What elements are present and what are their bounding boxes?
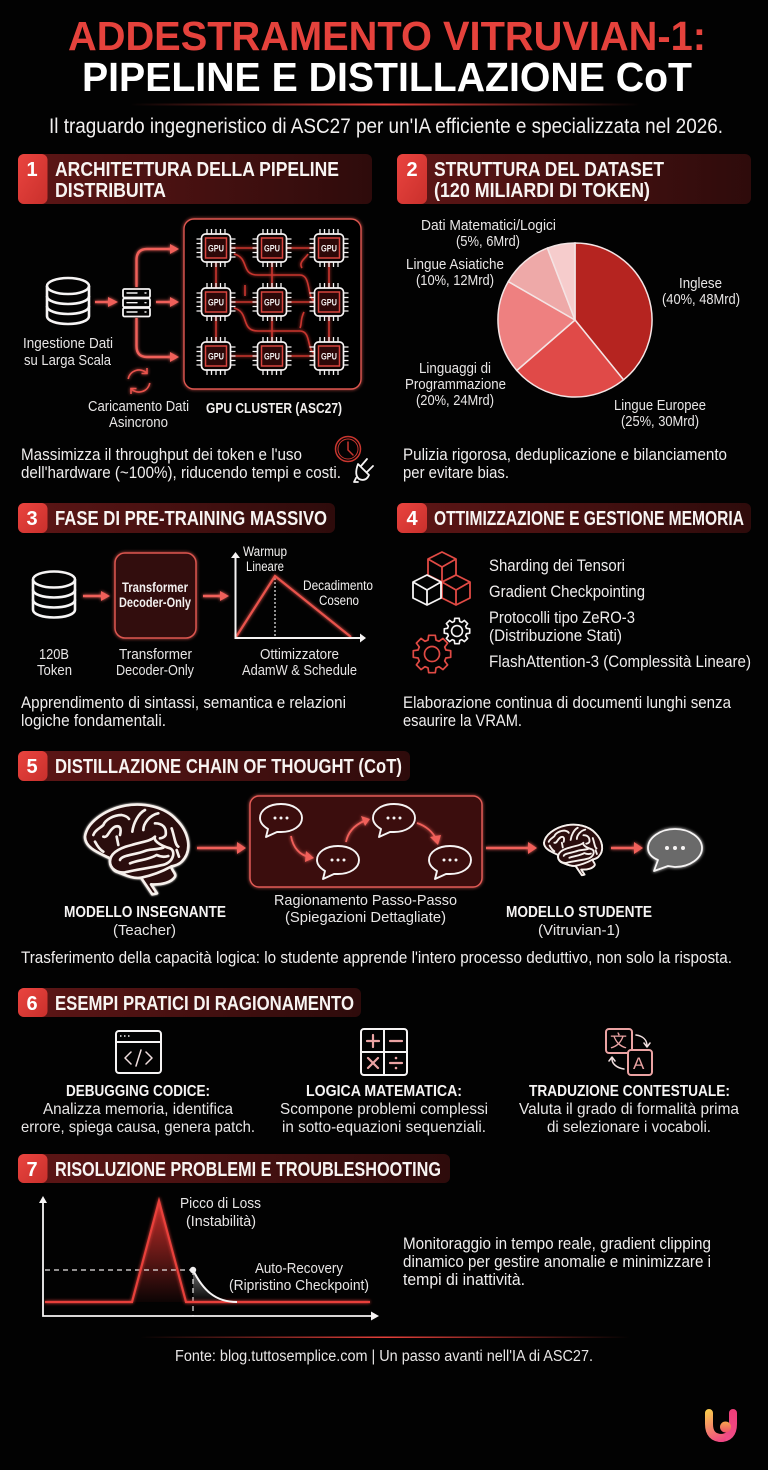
- labels: section 3: Transformer: [119, 646, 192, 663]
- icon: answer bubble: [648, 829, 702, 871]
- icon: code window: [116, 1031, 161, 1073]
- pie labels: Inglese: [679, 275, 722, 292]
- reasoning box: [250, 796, 482, 887]
- text: translation: Valuta il grado di formalità prima: [519, 1101, 739, 1118]
- transformer box: [115, 553, 196, 638]
- arrow: reasoning to student: [486, 842, 537, 854]
- pie labels: (10%, 12Mrd): [416, 272, 494, 289]
- text: section 4 description: esaurire la VRAM.: [403, 712, 522, 730]
- text: section 1 description: [21, 446, 341, 482]
- text: debugging: errore, spiega causa, genera patch.: [21, 1119, 255, 1136]
- text: async loading: Asincrono: [109, 414, 168, 431]
- heading: section 5: 5: [26, 756, 38, 778]
- heading: section 1: [18, 154, 372, 204]
- text: math logic: LOGICA MATEMATICA:: [306, 1083, 462, 1100]
- text: section 1 description: Massimizza il throughput dei token e l'uso: [21, 446, 302, 464]
- panel: section 2 dataset: [397, 154, 751, 482]
- chart: learning rate schedule: Coseno: [319, 593, 359, 608]
- text: section 2 description: per evitare bias.: [403, 464, 509, 482]
- text: debugging: Analizza memoria, identifica: [43, 1101, 233, 1118]
- text: async loading: [88, 398, 189, 431]
- text: section 2 description: [403, 446, 727, 482]
- labels: section 3: 120B: [39, 646, 69, 663]
- heading: section 2: (120 MILIARDI DI TOKEN): [434, 180, 650, 202]
- heading: section 1: ARCHITETTURA DELLA PIPELINE: [55, 159, 339, 181]
- list: techniques: FlashAttention-3 (Complessità Lineare): [489, 653, 751, 671]
- pie labels: (5%, 6Mrd): [456, 233, 520, 250]
- text: math logic: Scompone problemi complessi: [280, 1101, 488, 1118]
- chart: learning rate schedule: Warmup: [243, 544, 287, 559]
- chart: learning rate schedule: Decadimento: [303, 578, 373, 593]
- pie labels: Linguaggi di: [419, 360, 491, 377]
- chart: loss recovery: Picco di Loss: [180, 1195, 261, 1212]
- text: section 7 description: [403, 1235, 711, 1289]
- panel: section 3 pre-training: [18, 503, 373, 730]
- panel: section 7 troubleshooting: [18, 1154, 711, 1320]
- icon: async refresh: [128, 368, 150, 394]
- pie chart: [498, 243, 652, 397]
- GPU cluster: GPU: [208, 352, 224, 362]
- panel: section 4 memory optimisation: [397, 503, 751, 730]
- labels: section 5: MODELLO INSEGNANTE: [64, 904, 226, 921]
- arrow: teacher to reasoning: [197, 842, 246, 854]
- pie labels: Lingue Europee: [614, 397, 706, 414]
- transformer box: Decoder-Only: [119, 595, 191, 610]
- labels: section 3: AdamW & Schedule: [242, 662, 357, 679]
- labels: section 5: Ragionamento Passo-Passo: [274, 892, 457, 909]
- labels: section 5: (Vitruvian-1): [538, 922, 620, 939]
- pie labels: Programmazione: [405, 376, 506, 393]
- footer: Fonte: blog.tuttosemplice.com | Un passo avanti nell'IA di ASC27.: [175, 1348, 593, 1365]
- arrow: database to server: [95, 297, 118, 307]
- text: section 2 description: Pulizia rigorosa, deduplicazione e bilanciamento: [403, 446, 727, 464]
- title: [68, 13, 706, 100]
- GPU cluster: GPU: [321, 298, 337, 308]
- icon: gears: [413, 618, 470, 673]
- label: GPU cluster: GPU CLUSTER (ASC27): [206, 401, 342, 417]
- panel: section 1 pipeline architecture: [18, 154, 373, 482]
- arrow: transformer to schedule: [203, 591, 229, 601]
- text: section 7 description: Monitoraggio in tempo reale, gradient clipping: [403, 1235, 711, 1253]
- text: translation: [519, 1083, 739, 1136]
- arrow: student to answer: [611, 842, 643, 854]
- labels: section 5: (Spiegazioni Dettagliate): [285, 909, 446, 926]
- labels: section 5: [64, 892, 652, 939]
- heading: section 3: 3: [26, 508, 38, 530]
- pie labels: [405, 217, 740, 430]
- transformer box: Transformer: [122, 580, 189, 595]
- pie labels: (20%, 24Mrd): [416, 392, 494, 409]
- text: section 7 description: tempi di inattività.: [403, 1271, 525, 1289]
- text: translation: di selezionare i vocaboli.: [547, 1119, 711, 1136]
- chart: loss recovery: (Ripristino Checkpoint): [229, 1277, 369, 1294]
- chart: loss recovery: Auto-Recovery: [255, 1260, 343, 1277]
- heading: section 1: DISTRIBUITA: [55, 180, 166, 202]
- text: async loading: Caricamento Dati: [88, 398, 189, 415]
- list: techniques: Gradient Checkpointing: [489, 583, 645, 601]
- heading: section 6: 6: [26, 993, 38, 1015]
- GPU cluster: GPU: [264, 244, 280, 254]
- pie labels: Lingue Asiatiche: [406, 256, 504, 273]
- text: data ingestion: su Larga Scala: [24, 352, 112, 369]
- list: techniques: [489, 557, 751, 671]
- list: techniques: (Distribuzione Stati): [489, 627, 622, 645]
- heading: section 3: [18, 503, 335, 533]
- heading: section 5: [18, 751, 410, 781]
- heading: section 5: DISTILLAZIONE CHAIN OF THOUGHT (CoT): [55, 756, 402, 778]
- GPU cluster: GPU: [264, 352, 280, 362]
- GPU cluster: GPU: [321, 352, 337, 362]
- text: translation: TRADUZIONE CONTESTUALE:: [529, 1083, 730, 1100]
- heading: section 2: STRUTTURA DEL DATASET: [434, 159, 664, 181]
- text: data ingestion: [23, 335, 113, 369]
- heading: section 7: RISOLUZIONE PROBLEMI E TROUBLESHOOTING: [55, 1159, 441, 1181]
- GPU cluster: GPU: [321, 244, 337, 254]
- text: debugging: DEBUGGING CODICE:: [66, 1083, 210, 1100]
- chart: loss recovery: (Instabilità): [186, 1213, 256, 1230]
- heading: section 4: [397, 503, 751, 533]
- labels: section 5: (Teacher): [113, 922, 176, 939]
- text: section 1 description: dell'hardware (~100%), riducendo tempi e costi.: [21, 464, 341, 482]
- text: section 3 description: Apprendimento di sintassi, semantica e relazioni: [21, 694, 346, 712]
- icon: translation: A: [633, 1054, 645, 1073]
- list: techniques: Sharding dei Tensori: [489, 557, 625, 575]
- arrows: server to GPU cluster: [136, 244, 179, 362]
- labels: section 3: [37, 646, 357, 679]
- pie labels: (25%, 30Mrd): [621, 413, 699, 430]
- panel: section 5 distillation: [18, 751, 732, 967]
- icon: cubes: [413, 552, 470, 605]
- title: ADDESTRAMENTO VITRUVIAN-1:: [68, 13, 706, 59]
- icon: translation: [606, 1029, 652, 1075]
- labels: section 3: Token: [37, 662, 72, 679]
- GPU cluster: GPU: [208, 244, 224, 254]
- heading: section 6: [18, 988, 361, 1017]
- GPU cluster: GPU: [264, 298, 280, 308]
- title: PIPELINE E DISTILLAZIONE CoT: [82, 54, 692, 100]
- icon: clock: [336, 436, 360, 462]
- list: techniques: Protocolli tipo ZeRO-3: [489, 609, 635, 627]
- text: section 3 description: [21, 694, 346, 730]
- text: math logic: in sotto-equazioni sequenziali.: [282, 1119, 486, 1136]
- heading: section 6: ESEMPI PRATICI DI RAGIONAMENTO: [55, 993, 354, 1015]
- heading: section 7: [18, 1154, 450, 1183]
- icon: teacher brain: [85, 805, 188, 894]
- panel: section 6 examples: [18, 988, 739, 1136]
- arrow: token to transformer: [83, 591, 110, 601]
- heading: section 7: 7: [26, 1159, 38, 1181]
- pie labels: (40%, 48Mrd): [662, 291, 740, 308]
- text: section 3 description: logiche fondamentali.: [21, 712, 166, 730]
- heading: section 1: 1: [26, 159, 38, 181]
- icon: logo: [709, 1413, 733, 1438]
- heading: section 2: 2: [406, 159, 418, 181]
- icon: database: [33, 572, 75, 618]
- chart: learning rate schedule: [231, 544, 373, 642]
- text: debugging: [21, 1083, 255, 1136]
- icon: calculator: [361, 1029, 407, 1075]
- heading: section 4: 4: [406, 508, 418, 530]
- text: math logic: [280, 1083, 488, 1136]
- icon: server: [123, 289, 150, 316]
- GPU cluster: [184, 219, 361, 389]
- labels: section 3: Decoder-Only: [116, 662, 194, 679]
- icon: student brain: [544, 825, 602, 875]
- icon: plug: [354, 459, 373, 482]
- GPU cluster: GPU: [208, 298, 224, 308]
- icon: translation: 文: [610, 1032, 627, 1051]
- text: section 4 description: [403, 694, 732, 730]
- text: section 7 description: dinamico per gestire anomalie e minimizzare i: [403, 1253, 711, 1271]
- heading: section 3: FASE DI PRE-TRAINING MASSIVO: [55, 508, 327, 530]
- chart: learning rate schedule: Lineare: [246, 559, 284, 574]
- heading: section 2: [397, 154, 751, 204]
- pie labels: Dati Matematici/Logici: [421, 217, 556, 234]
- chart: loss recovery: [39, 1195, 379, 1320]
- icon: database: [47, 278, 89, 324]
- labels: section 3: Ottimizzatore: [260, 646, 339, 663]
- text: data ingestion: Ingestione Dati: [23, 335, 113, 352]
- text: section 4 description: Elaborazione continua di documenti lunghi senza: [403, 694, 732, 712]
- labels: section 5: MODELLO STUDENTE: [506, 904, 652, 921]
